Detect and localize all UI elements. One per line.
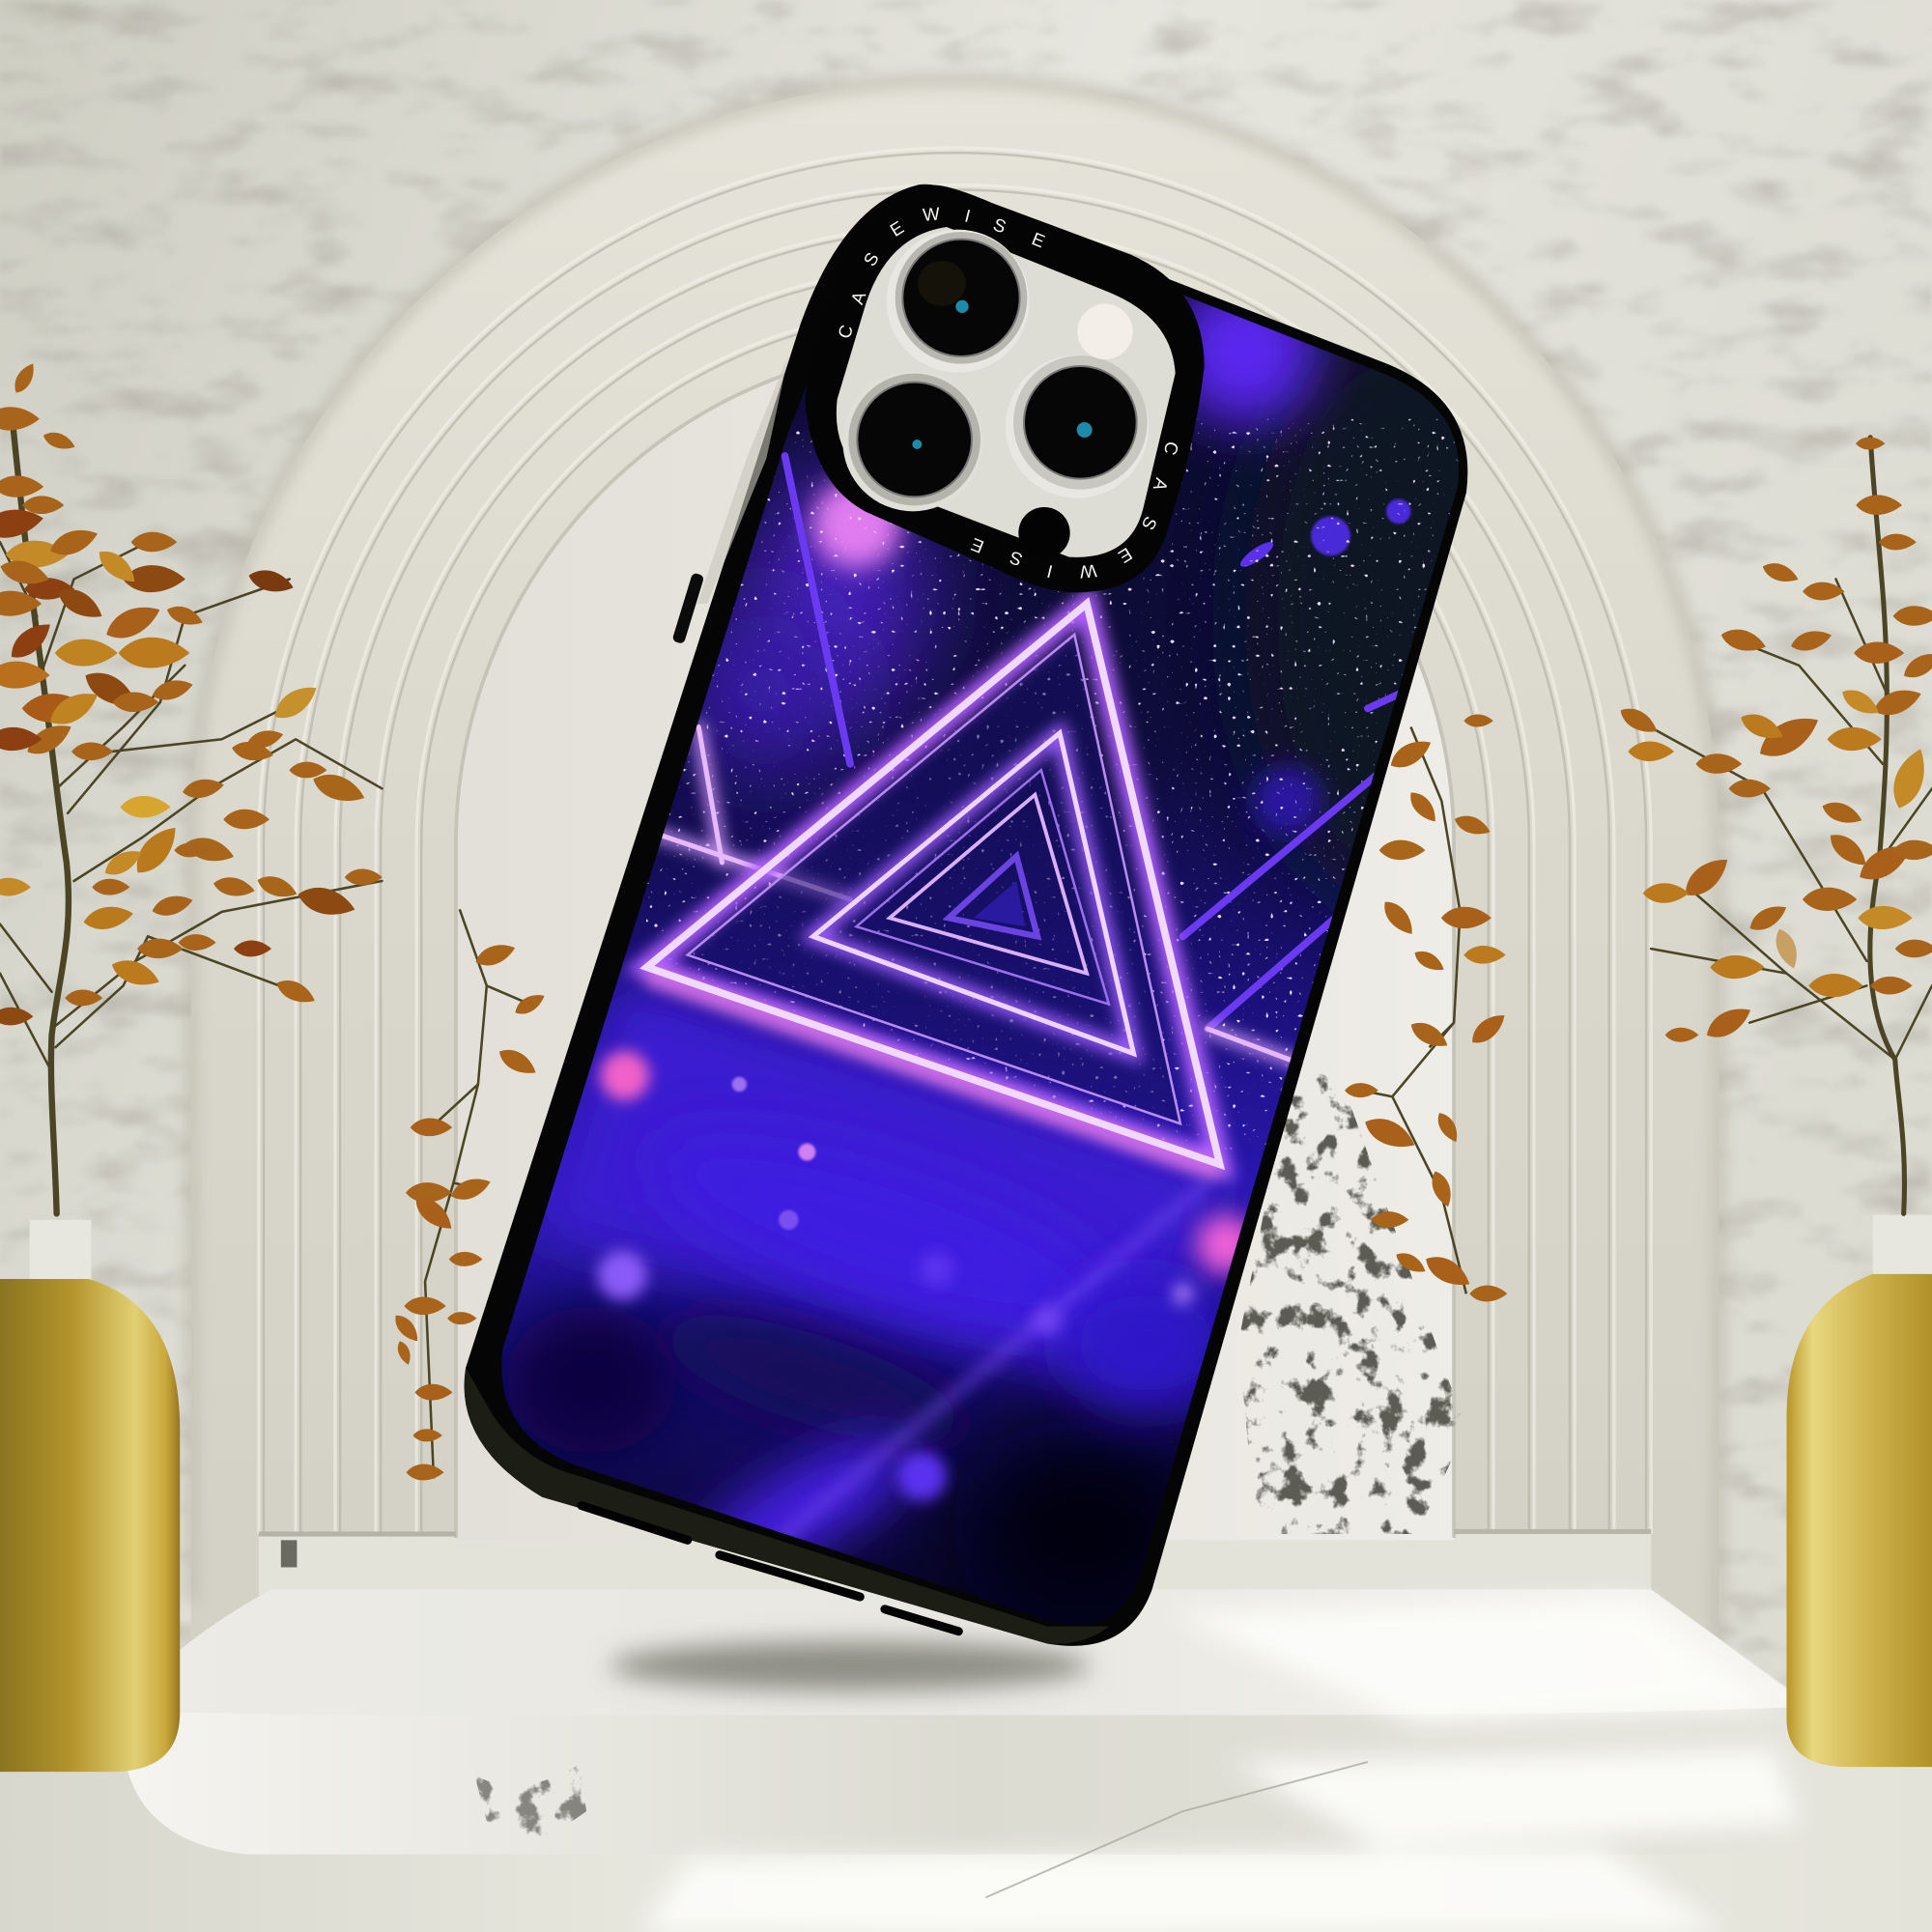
brand ring text: S: [1138, 513, 1161, 533]
dark marble veins: [1240, 1073, 1461, 1534]
brand ring text: E: [886, 216, 907, 241]
brand ring text: E: [968, 534, 986, 557]
phone shadow: [610, 1641, 1091, 1690]
brand ring text: I: [1045, 561, 1055, 582]
lower right lens: [1006, 355, 1149, 498]
brand ring text: S: [1007, 547, 1025, 570]
brand ring text: [834, 203, 1183, 582]
side button: [671, 573, 704, 644]
brand ring text: A: [846, 288, 870, 307]
lidar sensor: [1018, 507, 1070, 558]
mid-right vine: [1345, 714, 1510, 1301]
floor: [0, 1762, 1932, 1932]
brand ring text: C: [834, 323, 857, 341]
brand ring text: S: [991, 213, 1009, 237]
podium: [124, 1589, 1814, 1932]
left vase: [0, 1220, 180, 1772]
lower left lens: [842, 371, 983, 511]
mid-left vine: [390, 909, 548, 1480]
left plant: [0, 360, 383, 1213]
bottom lip: [465, 1368, 1109, 1644]
flash: [1077, 304, 1133, 359]
brand ring text: C: [1160, 439, 1183, 458]
right vase: [1786, 1215, 1932, 1767]
light patches: [640, 1602, 1799, 1932]
brand ring text: W: [1079, 560, 1097, 582]
brand ring text: I: [963, 206, 973, 226]
marble crack line: [985, 1762, 1368, 1897]
lower floor glow: [505, 974, 1256, 1638]
side highlight: [697, 355, 788, 604]
brand ring text: W: [922, 203, 941, 225]
brand ring text: A: [1150, 475, 1173, 494]
screen artwork: [501, 295, 1459, 1625]
brand ring text: S: [859, 248, 883, 270]
marble vein patch: [475, 1766, 586, 1841]
neon beams: [650, 456, 1448, 1065]
arch niche: [191, 80, 1719, 1651]
silver plate: [837, 227, 1176, 557]
bottom slots: [582, 1506, 958, 1632]
brand ring text: E: [1115, 544, 1136, 567]
camera bump: [805, 185, 1205, 592]
star field: [640, 419, 1479, 1182]
right plant: [1616, 437, 1932, 1213]
bump body: [805, 185, 1205, 592]
case frame: [465, 185, 1467, 1646]
brand ring text: E: [1029, 228, 1048, 251]
phone case: [465, 185, 1565, 1663]
top lens: [887, 230, 1030, 373]
upper purple glows: [678, 277, 1565, 912]
neon triangles: [647, 604, 1220, 1173]
